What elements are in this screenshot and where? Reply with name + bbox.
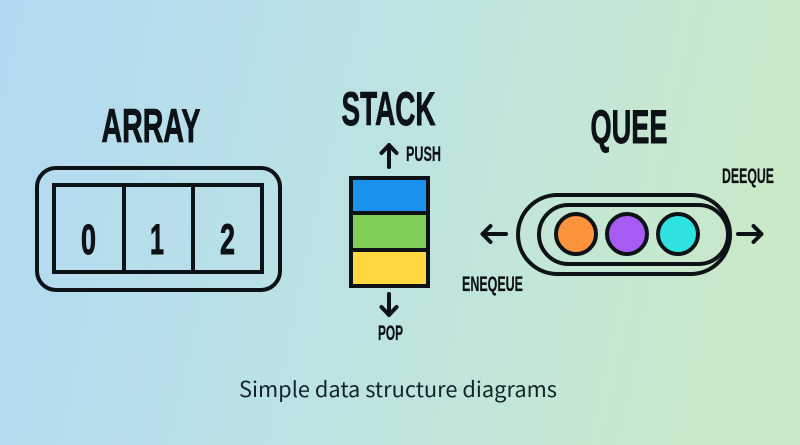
heading: array: ARRAY: [102, 99, 200, 152]
panel: array: [37, 99, 280, 290]
arrow: pop: [382, 294, 396, 315]
array outer frame: [37, 168, 280, 290]
array cells: [54, 185, 262, 272]
heading: stack: STACK: [342, 82, 436, 135]
index labels: [81, 216, 235, 264]
arrow: right: [738, 226, 762, 242]
label: push: PUSH: [406, 143, 441, 166]
label: enqueue: ENEQEUE: [462, 273, 523, 296]
heading: queue: QUEE: [590, 100, 668, 153]
panel: queue: [462, 100, 774, 296]
index labels: 2: [220, 216, 235, 264]
label: pop: POP: [378, 322, 403, 345]
queue outer pill: [518, 195, 730, 274]
caption: Simple data structure diagrams: [239, 373, 557, 404]
arrow: left: [482, 226, 506, 242]
panel: stack: [342, 82, 441, 345]
index labels: 1: [150, 216, 164, 264]
queue inner pill: [539, 205, 728, 264]
index labels: 0: [81, 216, 96, 264]
queue items: [556, 214, 698, 254]
arrow: push: [382, 145, 396, 167]
stack layers: [351, 178, 428, 286]
